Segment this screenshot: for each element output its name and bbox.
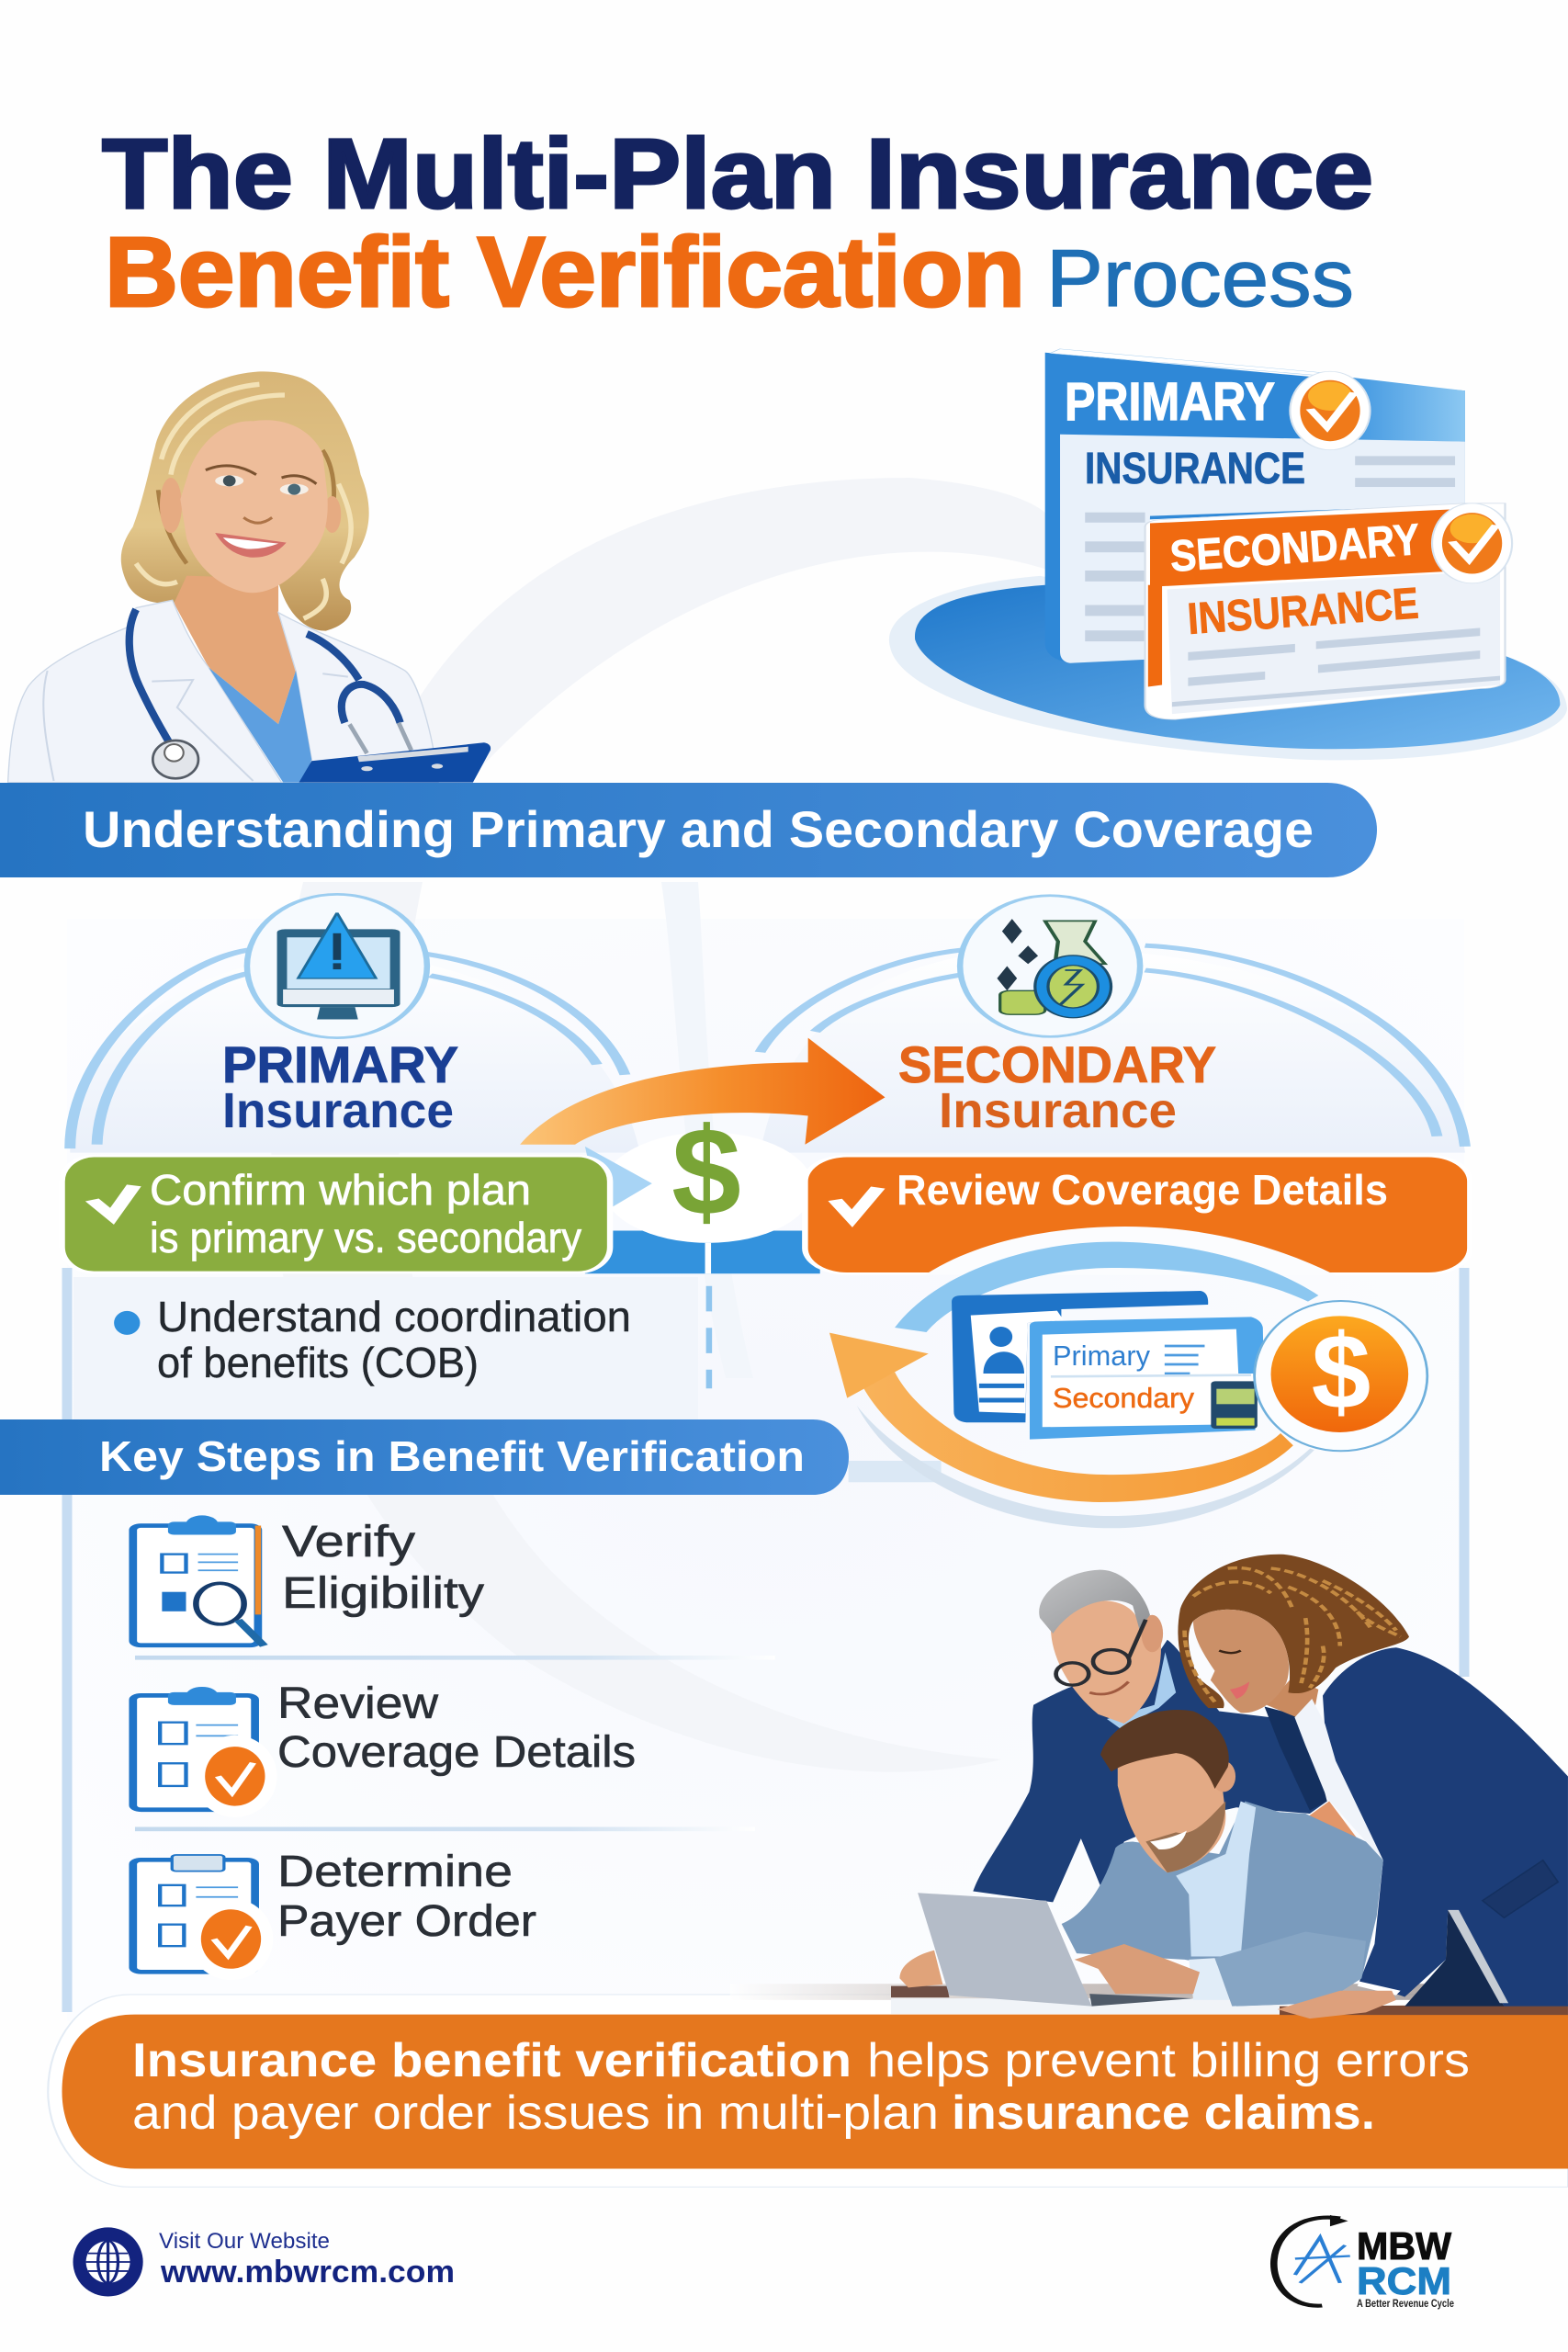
doctor facial features (206, 466, 316, 558)
primary insurance heading: PRIMARY (222, 1035, 458, 1093)
woman hand on shoulder (1308, 1802, 1358, 1843)
seated man suit (1062, 1802, 1383, 2007)
desk (891, 1986, 1568, 2015)
secondary insurance heading: SECONDARY (898, 1035, 1216, 1093)
icon: payer order clipboard (133, 1855, 273, 1980)
doctor ears (160, 478, 341, 533)
callout text: and payer order issues in multi-plan (132, 2086, 939, 2140)
illustration: insurance cards: INSURANCE (1186, 580, 1420, 644)
mini card text: Primary (1053, 1340, 1150, 1372)
callout text: helps prevent billing errors (867, 2034, 1470, 2087)
green panel (62, 1156, 610, 1272)
seated man sleeve (1214, 1931, 1366, 2007)
mini card text: Secondary (1053, 1382, 1195, 1414)
front card (1030, 1317, 1264, 1440)
icon: review coverage clipboard (133, 1687, 277, 1817)
callout text: insurance claims. (952, 2086, 1375, 2140)
doctor hair (121, 371, 369, 631)
secondary card text: SECONDARY (1168, 515, 1421, 582)
confirm text: is primary vs. secondary (150, 1214, 581, 1261)
banner: key steps (0, 1419, 849, 1495)
title (102, 118, 1373, 327)
primary insurance heading (222, 1035, 458, 1138)
secondary check badge (1432, 503, 1512, 583)
callout text: Insurance benefit verification (132, 2034, 852, 2087)
doctor scrubs (209, 668, 311, 783)
banner: understanding coverage: Understanding Primary and Secondary Coverage (83, 800, 1314, 858)
doctor neck and chest (174, 576, 296, 724)
icon: money bag (960, 896, 1140, 1036)
woman trousers with shirt strip (1404, 1910, 1508, 2007)
back man shirt (1107, 1652, 1176, 1728)
platform (915, 585, 1560, 749)
banner: key steps: Key Steps in Benefit Verification (99, 1432, 805, 1480)
woman neck (1267, 1677, 1318, 1724)
step labels: Payer Order (277, 1897, 536, 1946)
woman pocket (1483, 1860, 1558, 1917)
dollar symbol: $ (671, 1102, 741, 1241)
COB text: of benefits (COB) (157, 1339, 479, 1386)
coverage comparison section (0, 894, 1568, 2310)
arrow: primary to secondary (520, 1038, 885, 1145)
primary arches (70, 950, 625, 1148)
woman hair (1178, 1555, 1409, 1708)
pale connector from key steps banner (849, 1461, 942, 1482)
icon: verify eligibility clipboard (133, 1515, 264, 1645)
step labels (277, 1518, 636, 1946)
logo: MBW RCM: A Better Revenue Cycle (1357, 2297, 1454, 2310)
illustration: business team (891, 1555, 1568, 2018)
step labels: Verify (282, 1518, 415, 1566)
title: Benefit Verification (105, 216, 1025, 327)
arch interior fill (70, 947, 1465, 1153)
left hand (899, 1951, 942, 1987)
step labels: Review (277, 1679, 438, 1728)
primary insurance heading: Insurance (222, 1083, 454, 1138)
COB text (157, 1293, 631, 1386)
seated man hand (1075, 1944, 1200, 1994)
orange panel (805, 1156, 1470, 1275)
checkmark: orange panel (835, 1188, 878, 1218)
side rails (67, 1268, 1464, 2012)
banner: understanding coverage (0, 783, 1377, 877)
logo: MBW RCM: MBW (1357, 2224, 1451, 2267)
secondary insurance heading: Insurance (939, 1083, 1177, 1138)
logo: MBW RCM (1274, 2215, 1454, 2310)
seated man cuff (1189, 1958, 1230, 2000)
platform rim (889, 576, 1567, 760)
blue connector under dollar (585, 1132, 820, 1273)
secondary arches (760, 945, 1465, 1147)
clipboard (299, 742, 491, 783)
stethoscope (130, 609, 412, 778)
step labels: Eligibility (282, 1569, 484, 1618)
illustration: insurance cards (889, 349, 1567, 760)
illustration: insurance cards: INSURANCE (1085, 445, 1305, 493)
footer: website (73, 2227, 455, 2297)
band halo and surface (48, 1984, 1568, 2187)
title: The Multi-Plan Insurance (102, 118, 1373, 229)
checkmark: green panel (92, 1185, 134, 1216)
divider (135, 1656, 775, 1660)
woman cuff (1358, 1982, 1401, 1996)
back ID card (952, 1291, 1208, 1422)
orange arc (863, 1372, 1293, 1502)
bullet dot (114, 1311, 140, 1335)
doctor face (180, 420, 328, 593)
title: Process (1046, 232, 1354, 323)
doctor white coat (8, 600, 438, 783)
divider (135, 1826, 755, 1831)
review coverage text: Review Coverage Details (897, 1166, 1388, 1214)
step labels: Coverage Details (277, 1728, 636, 1777)
footer: website: www.mbwrcm.com (160, 2255, 455, 2290)
steps list (133, 1515, 775, 1980)
woman blazer (1323, 1647, 1568, 2007)
arc arrowhead (829, 1333, 929, 1398)
confirm text (150, 1166, 581, 1261)
woman face (1193, 1610, 1289, 1713)
logo mark (1274, 2215, 1350, 2306)
badge dollar: $ (1312, 1312, 1371, 1431)
woman shirt (1294, 1699, 1383, 1860)
laptop (918, 1893, 1193, 2007)
woman hand on desk (1278, 1991, 1396, 2018)
secondary card (1145, 503, 1505, 719)
primary card (1045, 349, 1465, 663)
woman blazer shadow side (1265, 1706, 1327, 1811)
website text: Visit Our Website (159, 2229, 330, 2254)
seated man shirt (1176, 1802, 1256, 1957)
secondary insurance heading (898, 1035, 1216, 1138)
callout text (132, 2034, 1470, 2140)
icon: globe (73, 2227, 143, 2297)
back man head (1039, 1570, 1163, 1724)
step labels: Determine (277, 1848, 513, 1896)
icon: monitor alert (247, 894, 427, 1038)
callout band (48, 1984, 1568, 2187)
COB text: Understand coordination (157, 1293, 631, 1340)
confirm text: Confirm which plan (150, 1166, 531, 1214)
blue arc (895, 1242, 1318, 1332)
cycle halo (857, 1406, 1314, 1528)
background watermark swirl (67, 478, 1464, 2021)
seated man head (1100, 1710, 1235, 1872)
coat lapels (43, 671, 348, 781)
illustration: doctor (8, 371, 491, 783)
primary card text: PRIMARY (1065, 372, 1275, 432)
dollar coin badge (1255, 1301, 1427, 1451)
back man suit (973, 1640, 1327, 1902)
mini card text (1053, 1340, 1195, 1414)
logo: MBW RCM: RCM (1357, 2259, 1451, 2302)
primary check badge (1290, 371, 1371, 450)
cycle diagram (829, 1242, 1427, 1528)
dashed divider (706, 1286, 712, 1388)
